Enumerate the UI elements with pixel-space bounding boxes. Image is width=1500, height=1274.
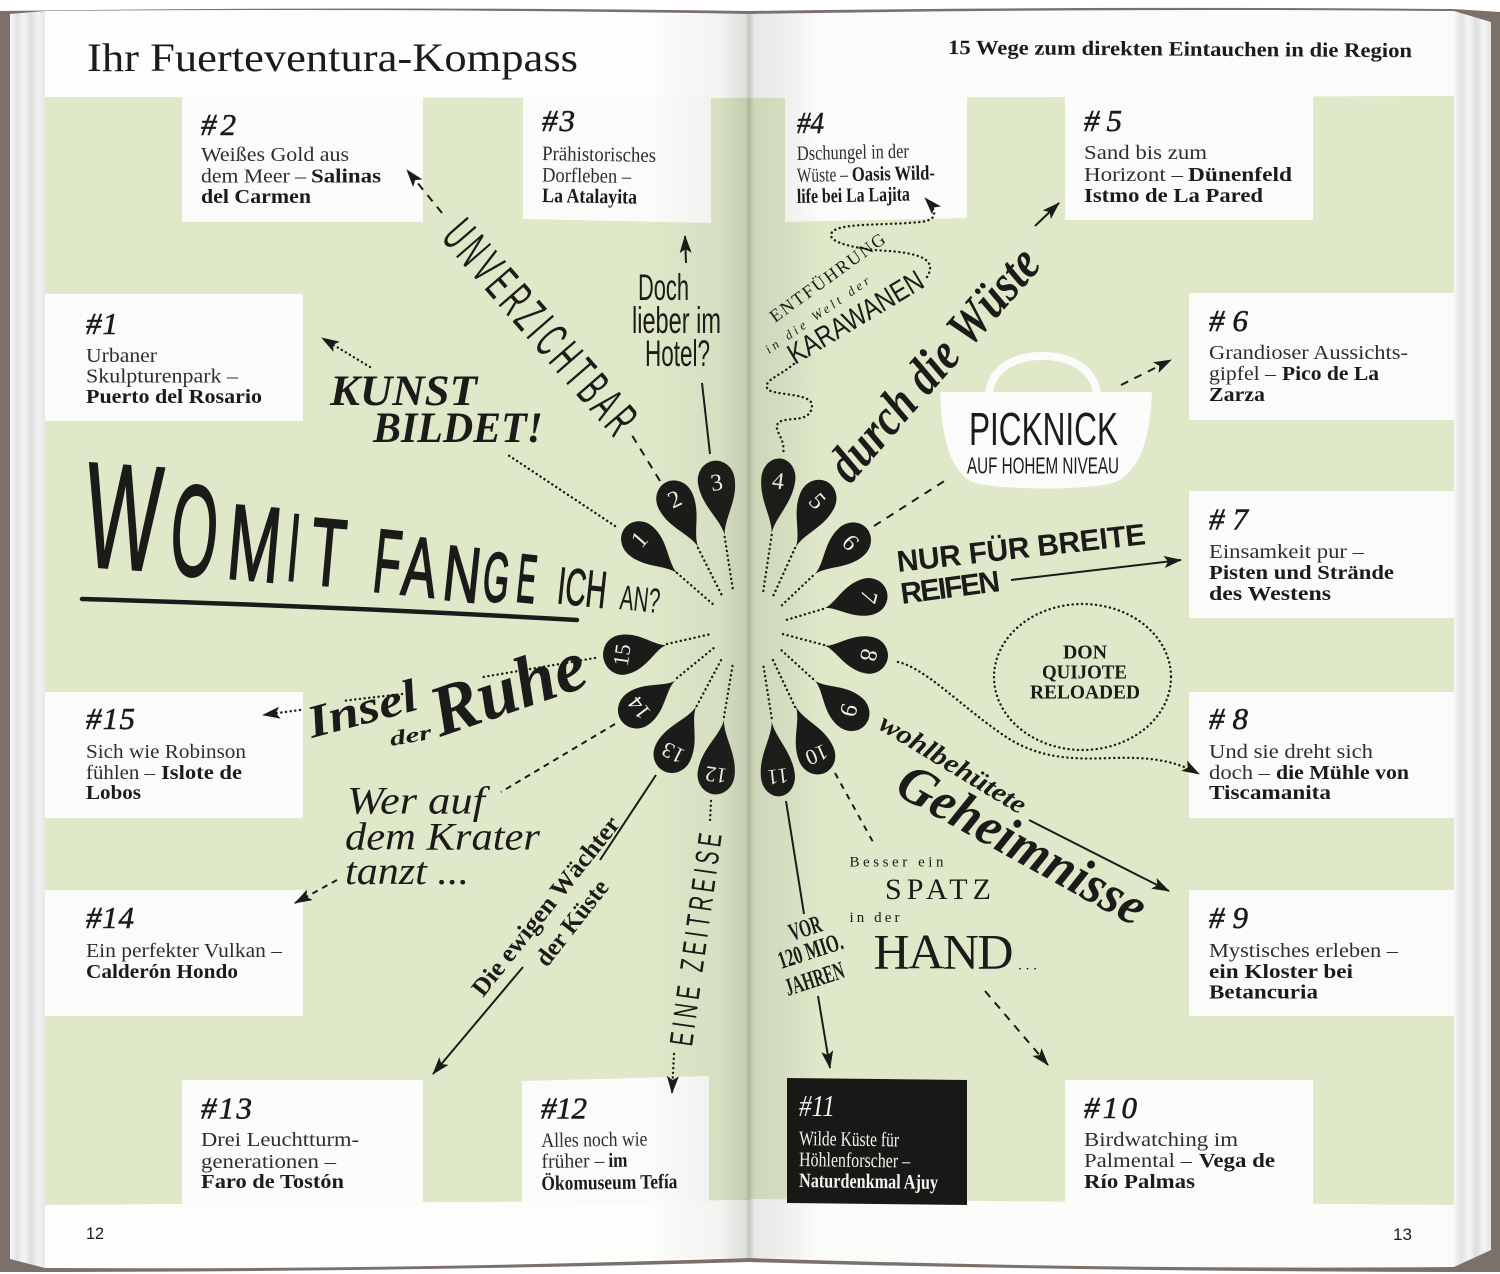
heading: WOMIT FANGE ICH AN?: N (439, 528, 485, 620)
pin 6: 6 (836, 530, 864, 556)
heading: WOMIT FANGE ICH AN?: I (283, 494, 304, 602)
pin 2: 2 (664, 486, 686, 514)
heading: WOMIT FANGE ICH AN?: W (80, 430, 168, 603)
arrow: basket to #6 (1121, 360, 1171, 385)
description #14: Ein perfekter Vulkan – (86, 940, 283, 962)
panel: #5 (1065, 93, 1313, 220)
description #9: Mystisches erleben – (1209, 940, 1399, 962)
dots: between Insel and Ruhe (342, 694, 402, 701)
callout: Insel der Ruhe: der (388, 720, 434, 751)
description #7 (1209, 541, 1394, 605)
description #5: Dünenfeld (1188, 164, 1293, 186)
panel: #1 (45, 294, 303, 421)
description #4: life bei La Lajita (797, 184, 910, 208)
description #6: gipfel – (1209, 363, 1277, 385)
callout: Besser ein Spatz in der Hand: Besser ein (850, 854, 944, 870)
compass: dotted spokes (667, 535, 824, 718)
description #2: Weißes Gold aus (201, 144, 349, 166)
description #10: Birdwatching im (1084, 1129, 1238, 1151)
description #2: Salinas (311, 166, 381, 188)
callout: Entführung in die Welt der Karawanen: in die Welt der (762, 273, 873, 356)
pin 11: 11 (766, 763, 790, 790)
description #1: Urbaner (86, 345, 157, 367)
description #13 (201, 1129, 359, 1193)
pin 3 (695, 458, 743, 538)
callout: Vor 120 Mio. Jahren: VOR (786, 911, 826, 947)
callout: Besser ein Spatz in der Hand: HAND (874, 924, 1014, 980)
description #8: Und sie dreht sich (1209, 741, 1373, 763)
description #8: Tiscamanita (1209, 782, 1331, 804)
description #15: Islote de (161, 762, 242, 784)
arrow: KUNST to #1 (322, 338, 370, 367)
pin 6 (803, 514, 879, 588)
pin 10 (779, 700, 841, 780)
dots: pin 15 to Ruhe (483, 658, 595, 677)
callout: Eine Zeitreise: EINE ZEITREISE (662, 831, 729, 1048)
description #3 (542, 143, 656, 209)
callout: KUNST BILDET!: KUNST (329, 368, 479, 415)
callout: KUNST BILDET! (329, 368, 543, 452)
heading: WOMIT FANGE ICH AN?: E (513, 540, 540, 618)
heading: WOMIT FANGE ICH AN?: M (223, 481, 286, 606)
pin 9: 9 (834, 701, 862, 719)
pin 1: 1 (626, 527, 654, 553)
callout: KUNST BILDET!: BILDET! (372, 405, 543, 452)
wavy connector: pin 4 to Karawanen (767, 363, 812, 451)
pin 5 (779, 474, 843, 554)
description #15: Lobos (86, 782, 141, 804)
description #2: dem Meer – (201, 166, 307, 188)
pin 15: 15 (608, 642, 636, 668)
heading #6: #6 (1209, 303, 1248, 338)
pin 15 (599, 625, 670, 679)
description #9: Betancuria (1209, 982, 1318, 1004)
panel: #7 (1189, 491, 1454, 618)
panel: #6 (1189, 293, 1454, 420)
heading #4: #4 (797, 105, 824, 140)
callout: Wer auf dem Krater tanzt: tanzt ... (345, 850, 469, 893)
arrow: Zeitreise to #12 (672, 1054, 674, 1093)
arrow: pin 8 to #8 (898, 662, 1199, 774)
description #3: Prähistorisches (542, 143, 656, 167)
heading #14: #14 (86, 900, 134, 935)
callout: NUR FÜR BREITE REIFEN (895, 518, 1147, 611)
dots: pin 12 to Zeitreise (710, 801, 711, 822)
panel: #2 (182, 97, 423, 222)
callout: Besser ein Spatz in der Hand: SPATZ (885, 873, 991, 906)
connector: pin 11 to Vor 120 Mio. (786, 801, 804, 914)
description #11: Wilde Küste für (799, 1128, 899, 1151)
panel: #14 (45, 890, 303, 1016)
description #14 (86, 940, 283, 983)
pin 7 (820, 574, 892, 626)
callout: Insel der Ruhe (300, 624, 596, 752)
heading #12: #12 (541, 1090, 587, 1126)
description #15: fühlen – (86, 762, 156, 784)
heading #8: #8 (1209, 701, 1248, 736)
description #9 (1209, 940, 1399, 1004)
description #4: Oasis Wild- (852, 162, 935, 186)
description #13: Drei Leuchtturm- (201, 1129, 359, 1151)
description #5: Sand bis zum (1084, 142, 1207, 164)
callout: UNVERZICHTBAR: UNVERZICHTBAR (431, 209, 648, 446)
heading #5: #5 (1084, 103, 1122, 138)
callout: Doch lieber im Hotel?: lieber im (632, 300, 721, 341)
page number 13: 13 (1393, 1225, 1412, 1244)
description #1: Skulpturenpark – (86, 366, 239, 388)
description #5 (1084, 142, 1293, 207)
callout: Die ewigen Wächter der Küste: der Küste (530, 875, 615, 972)
pin 13: 13 (658, 737, 688, 769)
description #8: die Mühle von (1276, 762, 1410, 784)
description #15: Sich wie Robinson (86, 741, 246, 763)
heading: WOMIT FANGE ICH AN?: O (166, 456, 223, 605)
callout: Wer auf dem Krater tanzt: Wer auf (347, 780, 491, 822)
description #4: Wüste – (797, 164, 849, 187)
description #8: doch – (1209, 762, 1271, 784)
callout: Doch lieber im Hotel?: Doch (638, 267, 689, 308)
callout: Doch lieber im Hotel? (632, 267, 721, 374)
description #12: früher – (541, 1150, 605, 1173)
description #13: Faro de Tostón (201, 1171, 345, 1193)
pin 7: 7 (854, 588, 882, 606)
description #2: del Carmen (201, 186, 312, 208)
arrow: durch die Wüste to #5 (1035, 203, 1059, 226)
description #3: La Atalayita (542, 185, 637, 209)
gutter shading (650, 14, 819, 1258)
green panel: left page (45, 97, 750, 1205)
description #6: Pico de La (1282, 363, 1379, 385)
arrow: tanzt to #14 (295, 880, 337, 903)
heading #15: #15 (86, 701, 135, 736)
description #11: Naturdenkmal Ajuy (799, 1170, 939, 1194)
description #5: Istmo de La Pared (1084, 185, 1264, 207)
callout: Entführung in die Welt der Karawanen: ENTFÜHRUNG (766, 229, 889, 326)
pin 3: 3 (709, 470, 725, 497)
pin 12: 12 (703, 761, 729, 789)
arrow: Wächter to #13 (433, 967, 523, 1074)
description #9: ein Kloster bei (1209, 961, 1353, 983)
description #15 (86, 741, 246, 804)
description #5: Horizont – (1084, 164, 1184, 186)
heading: WOMIT FANGE ICH AN?: A (398, 518, 442, 615)
heading #10: #10 (1084, 1090, 1138, 1125)
heading #3: #3 (542, 103, 575, 138)
description #12: Alles noch wie (541, 1129, 648, 1152)
panel: #11 (black) (787, 1078, 967, 1205)
callout: Don Quijote Reloaded: QUIJOTE (1042, 662, 1127, 684)
pin 14 (610, 666, 686, 736)
arrow: Geheimnisse to #9 (1029, 820, 1169, 891)
heading: WOMIT FANGE ICH AN?: F (369, 511, 406, 614)
wavy arrow: Karawanen to #4 (831, 198, 934, 277)
callout: Besser ein Spatz in der Hand: ... (1018, 958, 1037, 974)
panel: #15 (45, 692, 303, 818)
pin 8: 8 (854, 646, 882, 664)
picnic subtitle: AUF HOHEM NIVEAU (967, 452, 1119, 478)
callout: Insel der Ruhe: Ruhe (418, 624, 596, 752)
callout: Don Quijote Reloaded (994, 604, 1171, 750)
callout: NUR FÜR BREITE REIFEN: NUR FÜR BREITE (895, 518, 1147, 579)
pin 8 (821, 628, 891, 677)
title: Ihr Fuerteventura-Kompass (87, 35, 578, 80)
connector: pin 14 to Krater (501, 724, 615, 792)
arrow: UNVERZICHTBAR to #2 (407, 170, 442, 213)
description #7: Einsamkeit pur – (1209, 541, 1365, 563)
description #4: Dschungel in der (797, 141, 909, 165)
subtitle: 15 Wege zum direkten Eintauchen in die Region (948, 37, 1413, 62)
heading: WOMIT FANGE ICH AN? (80, 430, 662, 621)
description #10: Vega de (1199, 1150, 1275, 1172)
heading: WOMIT FANGE ICH AN?: G (479, 537, 513, 618)
connector: pin 3 to Hotel (702, 383, 710, 454)
callout: wohlbehütete Geheimnisse: wohlbehütete (874, 707, 1032, 820)
pin 13 (647, 698, 713, 780)
heading #7: #7 (1209, 502, 1250, 536)
description #4 (797, 141, 935, 208)
description #7: Pisten und Strände (1209, 562, 1394, 584)
pin 11 (755, 720, 797, 798)
description #8 (1209, 741, 1410, 804)
connector: pin 10 to Spatz (835, 773, 873, 842)
heading: WOMIT FANGE ICH AN?: AN? (618, 578, 662, 621)
pin 4: 4 (770, 468, 786, 495)
connector: pin 13 to Wächter (600, 775, 656, 860)
panel: #12 (522, 1076, 709, 1206)
page stack: left (10, 11, 45, 1268)
description #12: Ökomuseum Tefía (541, 1170, 678, 1195)
description #2 (201, 144, 381, 208)
callout: Die ewigen Wächter der Küste: Die ewigen Wächter (467, 811, 626, 1002)
panel: #9 (1189, 890, 1454, 1016)
callout: durch die Wüste: durch die Wüste (816, 236, 1052, 493)
heading underline (82, 599, 577, 620)
callout: Besser ein Spatz in der Hand (850, 854, 1037, 980)
arrow: Insel to #15 (263, 710, 300, 715)
description #10 (1084, 1129, 1275, 1193)
heading: WOMIT FANGE ICH AN?: T (306, 498, 350, 608)
green panel: right page (749, 96, 1454, 1205)
description #13: generationen – (201, 1151, 337, 1173)
description #3: Dorfleben – (542, 165, 632, 188)
description #6: Zarza (1209, 384, 1265, 406)
callout: Vor 120 Mio. Jahren: JAHREN (782, 957, 848, 1002)
description #1 (86, 345, 262, 408)
callout: Vor 120 Mio. Jahren (775, 911, 848, 1002)
icon: picnic basket (940, 356, 1152, 488)
description #10: Río Palmas (1084, 1171, 1195, 1193)
panel: #10 (1065, 1080, 1313, 1205)
heading #9: #9 (1209, 900, 1248, 935)
connector: pin 6 to basket (874, 480, 946, 526)
callout: wohlbehütete Geheimnisse: Geheimnisse (887, 751, 1158, 937)
pin 12 (695, 717, 742, 797)
arrow: Jahren to #11 (818, 996, 830, 1068)
callout: Besser ein Spatz in der Hand: in der (850, 910, 900, 926)
description #14: Calderón Hondo (86, 961, 238, 983)
callout: NUR FÜR BREITE REIFEN: REIFEN (899, 565, 1002, 611)
left page (45, 10, 750, 1268)
connector: pin 1 to KUNST (508, 455, 615, 526)
description #6: Grandioser Aussichts- (1209, 342, 1408, 364)
description #7: des Westens (1209, 583, 1331, 605)
callout: Vor 120 Mio. Jahren: 120 MIO. (775, 928, 847, 975)
pin 5: 5 (803, 489, 830, 515)
panel: #3 (523, 94, 711, 223)
heading #2: #2 (201, 107, 236, 142)
callout: Entführung in die Welt der Karawanen: KARAWANEN (782, 265, 930, 371)
description #10: Palmental – (1084, 1150, 1193, 1172)
heading: WOMIT FANGE ICH AN?: ICH (555, 557, 610, 620)
pin 14: 14 (622, 692, 656, 724)
right page (749, 10, 1454, 1268)
arrow: Hotel to #3 (685, 236, 686, 263)
description #6 (1209, 342, 1408, 406)
arrow: Hand to #10 (985, 991, 1048, 1065)
callout: Insel der Ruhe: Insel (300, 669, 423, 748)
panel: #4 (785, 92, 967, 222)
callout: Wer auf dem Krater tanzt: dem Krater (345, 816, 541, 858)
compass: numbered pins (599, 456, 892, 798)
callout: Wer auf dem Krater tanzt (345, 780, 541, 893)
callout: Don Quijote Reloaded: DON (1063, 642, 1108, 664)
pin 1 (613, 513, 689, 587)
description #11 (799, 1128, 939, 1194)
callout: Doch lieber im Hotel?: Hotel? (645, 333, 710, 374)
heading #13: #13 (201, 1090, 252, 1126)
page number 12: 12 (86, 1224, 104, 1243)
pin 9 (803, 667, 877, 739)
pin 4 (755, 456, 798, 535)
pin 2 (650, 474, 715, 555)
description #11: Höhlenforscher – (799, 1149, 911, 1173)
panel: #8 (1189, 692, 1454, 818)
arrow: Reifen to #7 (1011, 560, 1181, 580)
picnic title: PICKNICK (969, 403, 1118, 455)
heading #1: #1 (86, 306, 118, 341)
description #12 (541, 1129, 678, 1195)
panel: #13 (182, 1080, 423, 1205)
description #1: Puerto del Rosario (86, 386, 262, 408)
connector: pin 2 to UNVERZICHTBAR (630, 432, 660, 481)
pin 10: 10 (802, 739, 832, 771)
description #12: im (608, 1150, 628, 1172)
page stack: right (1454, 11, 1491, 1267)
callout: Entführung in die Welt der Karawanen (762, 229, 930, 371)
heading #11: #11 (799, 1088, 835, 1123)
callout: Don Quijote Reloaded: RELOADED (1030, 682, 1140, 704)
